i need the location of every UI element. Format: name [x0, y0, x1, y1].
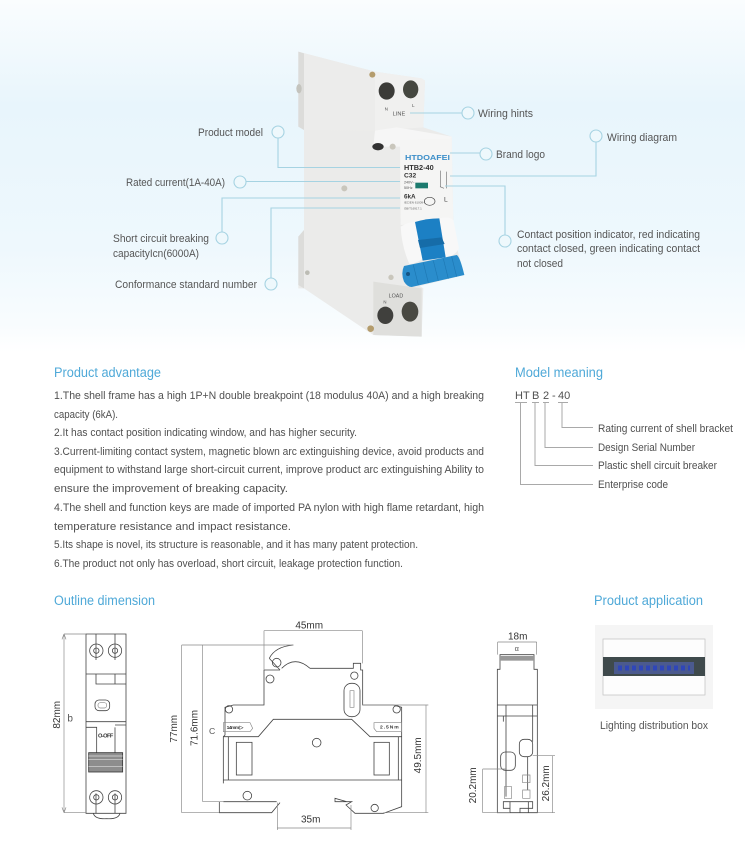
callout: Wiring hints: Wiring hints	[478, 108, 533, 120]
callout: Brand logo	[480, 148, 545, 161]
product photo: circuit breaker: C32	[404, 172, 417, 179]
side view drawing: 35m	[301, 815, 320, 826]
product photo: circuit breaker: HTDOAFEI	[405, 155, 450, 162]
callout: Rated current: Rated current(1A-40A)	[126, 177, 225, 189]
model meaning diagram: Design Serial Number	[598, 442, 695, 454]
model meaning diagram: 40	[558, 390, 570, 402]
front view drawing: O-OFF	[98, 734, 114, 740]
product photo: circuit breaker: N	[385, 106, 388, 111]
callout: Contact position indicator: not closed	[517, 258, 563, 270]
heading: Outline dimension: Outline dimension	[54, 593, 155, 608]
end view drawing: 18m	[508, 631, 527, 642]
end view drawing: 26.2mm	[541, 765, 552, 801]
text block: advantages: 3.Current-limiting contact system, magnetic blown arc extinguishing device, avoid products and	[54, 446, 484, 458]
product photo: circuit breaker: GB/T16917.1	[404, 206, 422, 210]
callout: Wiring diagram: Wiring diagram	[607, 132, 677, 144]
side view drawing: 77mm	[169, 715, 180, 743]
product photo: circuit breaker: HTB2-40	[404, 163, 434, 172]
end view drawing: α	[515, 644, 520, 653]
heading: Product advantage: Product advantage	[54, 365, 161, 380]
text block: advantages: 2.It has contact position indicating window, and has higher security.	[54, 427, 357, 439]
side view drawing: 45mm	[295, 621, 323, 632]
product photo: circuit breaker	[296, 52, 464, 337]
product photo: circuit breaker: 240V~	[404, 181, 415, 185]
model meaning diagram: B	[532, 390, 539, 402]
model meaning diagram: -	[552, 390, 556, 402]
product photo: circuit breaker: 50Hz	[404, 186, 413, 190]
text block: advantages: ensure the improvement of breaking capacity.	[54, 483, 288, 495]
side view drawing: 2.5Nm	[380, 725, 399, 731]
text block: advantages: 4.The shell and function keys are made of imported PA nylon with high flame retardant, high	[54, 502, 484, 514]
model meaning diagram	[515, 390, 733, 491]
side view drawing: 49.5mm	[413, 737, 424, 773]
callout: Contact position indicator	[499, 229, 700, 270]
model meaning diagram: 2	[543, 390, 549, 402]
callout: Short circuit breaking capacity: Short circuit breaking	[113, 233, 209, 245]
model meaning diagram: Rating current of shell bracket	[598, 423, 733, 435]
callout: Brand logo: Brand logo	[496, 149, 545, 161]
callout: Product model: Product model	[198, 127, 263, 139]
callout: Contact position indicator: Contact position indicator, red indicating	[517, 229, 700, 241]
text block: advantages: 6.The product not only has overload, short circuit, leakage protection function.	[54, 558, 403, 570]
callout: Short circuit breaking capacity: capacityIcn(6000A)	[113, 248, 199, 260]
text block: advantages: capacity (6kA).	[54, 409, 118, 421]
product photo: circuit breaker: IEC/EN 61009-1	[404, 200, 426, 204]
background	[0, 0, 745, 352]
side view drawing	[169, 621, 428, 830]
callout: Short circuit breaking capacity	[113, 232, 228, 260]
callout lines	[222, 113, 596, 278]
application photo: distribution box	[595, 625, 713, 709]
side view drawing: C	[209, 726, 215, 736]
callout: Wiring hints	[462, 107, 533, 120]
model meaning diagram: HT	[515, 390, 530, 402]
product photo: circuit breaker: L	[412, 103, 415, 108]
end view drawing: 20.2mm	[468, 767, 479, 803]
callout: Conformance standard number: Conformance standard number	[115, 279, 257, 291]
end view drawing	[468, 631, 555, 813]
front view drawing: b	[67, 713, 73, 724]
front view drawing	[52, 634, 126, 819]
text block: advantages: 5.Its shape is novel, its structure is reasonable, and it has many patent protection.	[54, 539, 418, 551]
product photo: circuit breaker: LINE	[393, 111, 405, 117]
front view drawing: 82mm	[52, 701, 63, 729]
model meaning diagram: Enterprise code	[598, 479, 668, 491]
text block: advantages	[54, 390, 484, 570]
caption: Lighting distribution box: Lighting distribution box	[600, 720, 708, 732]
product photo: circuit breaker: N	[383, 299, 386, 304]
product photo: circuit breaker: LOAD	[389, 294, 403, 300]
product photo: circuit breaker: 6kA	[404, 193, 416, 200]
text block: advantages: equipment to withstand large short-circuit current, improve product arc extinguishing Ability to	[54, 464, 484, 476]
text block: advantages: 1.The shell frame has a high 1P+N double breakpoint (18 modulus 40A) and a high breaking	[54, 390, 484, 402]
callout: Wiring diagram	[590, 130, 677, 144]
side view drawing: 71.6mm	[189, 710, 200, 746]
product photo: circuit breaker: L	[444, 196, 448, 203]
callout: Contact position indicator: contact closed, green indicating contact	[517, 243, 700, 255]
heading: Product application: Product application	[594, 593, 703, 608]
text block: advantages: temperature resistance and impact resistance.	[54, 521, 291, 533]
side view drawing: 14mm ▷	[227, 725, 244, 731]
model meaning diagram: Plastic shell circuit breaker	[598, 460, 717, 472]
heading: Model meaning: Model meaning	[515, 365, 603, 380]
